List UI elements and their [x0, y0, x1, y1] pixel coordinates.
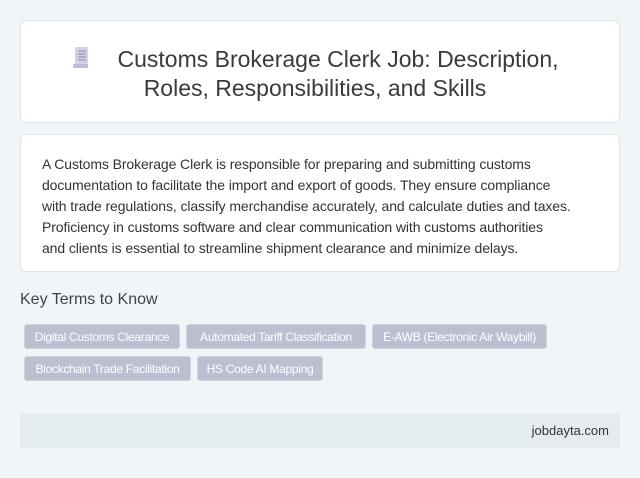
description text: Proficiency in customs software and clear communication with customs authorities — [42, 219, 543, 235]
tags: Automated Tariff Classification — [200, 330, 352, 344]
footer — [20, 414, 620, 448]
footer: jobdayta.com — [532, 423, 609, 438]
title: Customs Brokerage Clerk Job: Description, Roles, Responsibilities, and Skills — [118, 46, 558, 101]
header card — [20, 20, 620, 123]
description card — [20, 134, 620, 272]
icon: document — [73, 47, 88, 68]
description text: with trade regulations, classify merchandise accurately, and calculate duties and taxes. — [42, 198, 571, 214]
tags: Blockchain Trade Facilitation — [35, 362, 180, 376]
tags: E-AWB (Electronic Air Waybill) — [383, 330, 536, 344]
tags: Digital Customs Clearance — [35, 330, 169, 344]
description text: documentation to facilitate the import and export of goods. They ensure compliance — [42, 177, 550, 193]
tags: HS Code AI Mapping — [207, 362, 313, 376]
heading: key terms: Key Terms to Know — [20, 291, 158, 308]
description text: and clients is essential to streamline shipment clearance and minimize delays. — [42, 240, 518, 256]
description text — [42, 156, 571, 256]
description text: A Customs Brokerage Clerk is responsible for preparing and submitting customs — [42, 156, 531, 172]
